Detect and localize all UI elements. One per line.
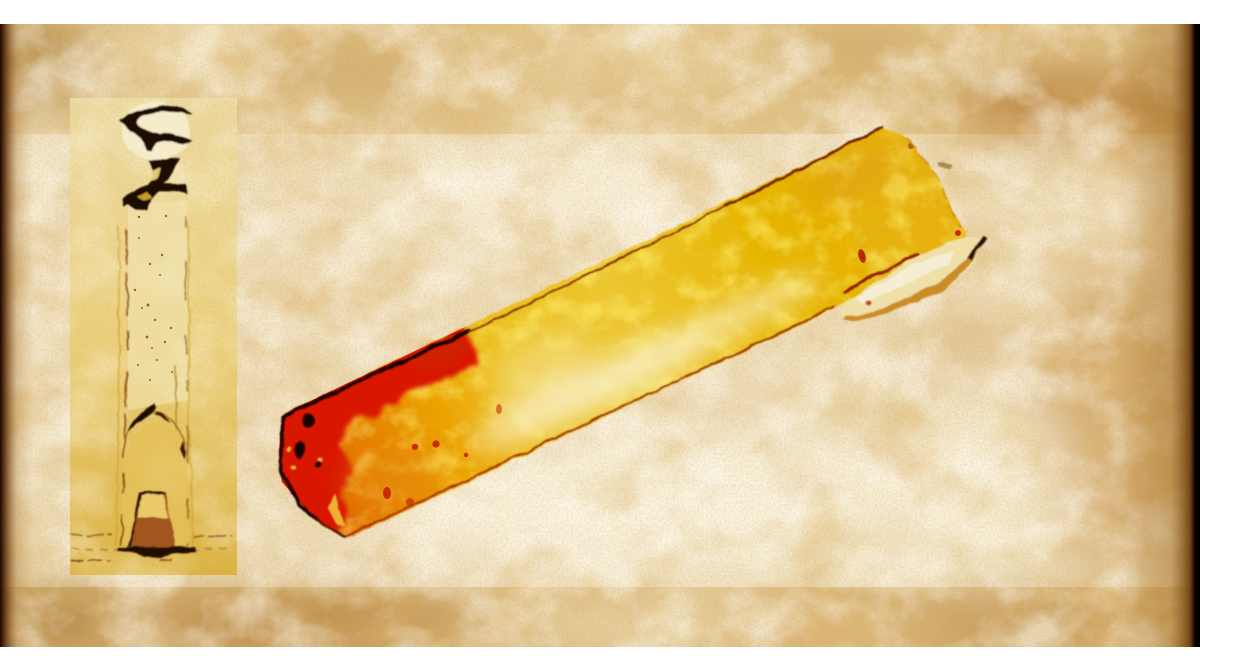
central lighter band xyxy=(0,134,1200,587)
ember highlights xyxy=(286,446,345,527)
left vignette xyxy=(0,24,34,647)
tower base shadow xyxy=(118,546,196,558)
tobacco flecks xyxy=(938,162,953,170)
tower body xyxy=(128,200,188,410)
bottom band xyxy=(0,587,1200,647)
burn spots xyxy=(383,404,502,506)
tower dots xyxy=(134,215,173,381)
ash holes xyxy=(295,414,321,468)
tower mid ornament xyxy=(128,403,187,460)
top band xyxy=(0,24,1200,134)
tower top ornament xyxy=(119,102,192,210)
tail paper flap xyxy=(842,236,987,322)
cigarette body xyxy=(279,127,966,537)
tower sketch panel xyxy=(70,98,237,575)
tower ground lines xyxy=(70,535,232,561)
tower doorway xyxy=(128,492,175,547)
cigarette shading xyxy=(270,120,980,540)
right vignette xyxy=(1115,24,1200,647)
pale patch xyxy=(465,266,827,462)
cigarette butt xyxy=(270,120,987,540)
burnt red end xyxy=(270,325,478,540)
stain marks near filter xyxy=(858,249,866,263)
cigarette edge lines xyxy=(280,127,960,537)
tower arch fill xyxy=(121,421,189,545)
orange patch xyxy=(799,146,902,210)
tower outlines xyxy=(116,215,193,545)
